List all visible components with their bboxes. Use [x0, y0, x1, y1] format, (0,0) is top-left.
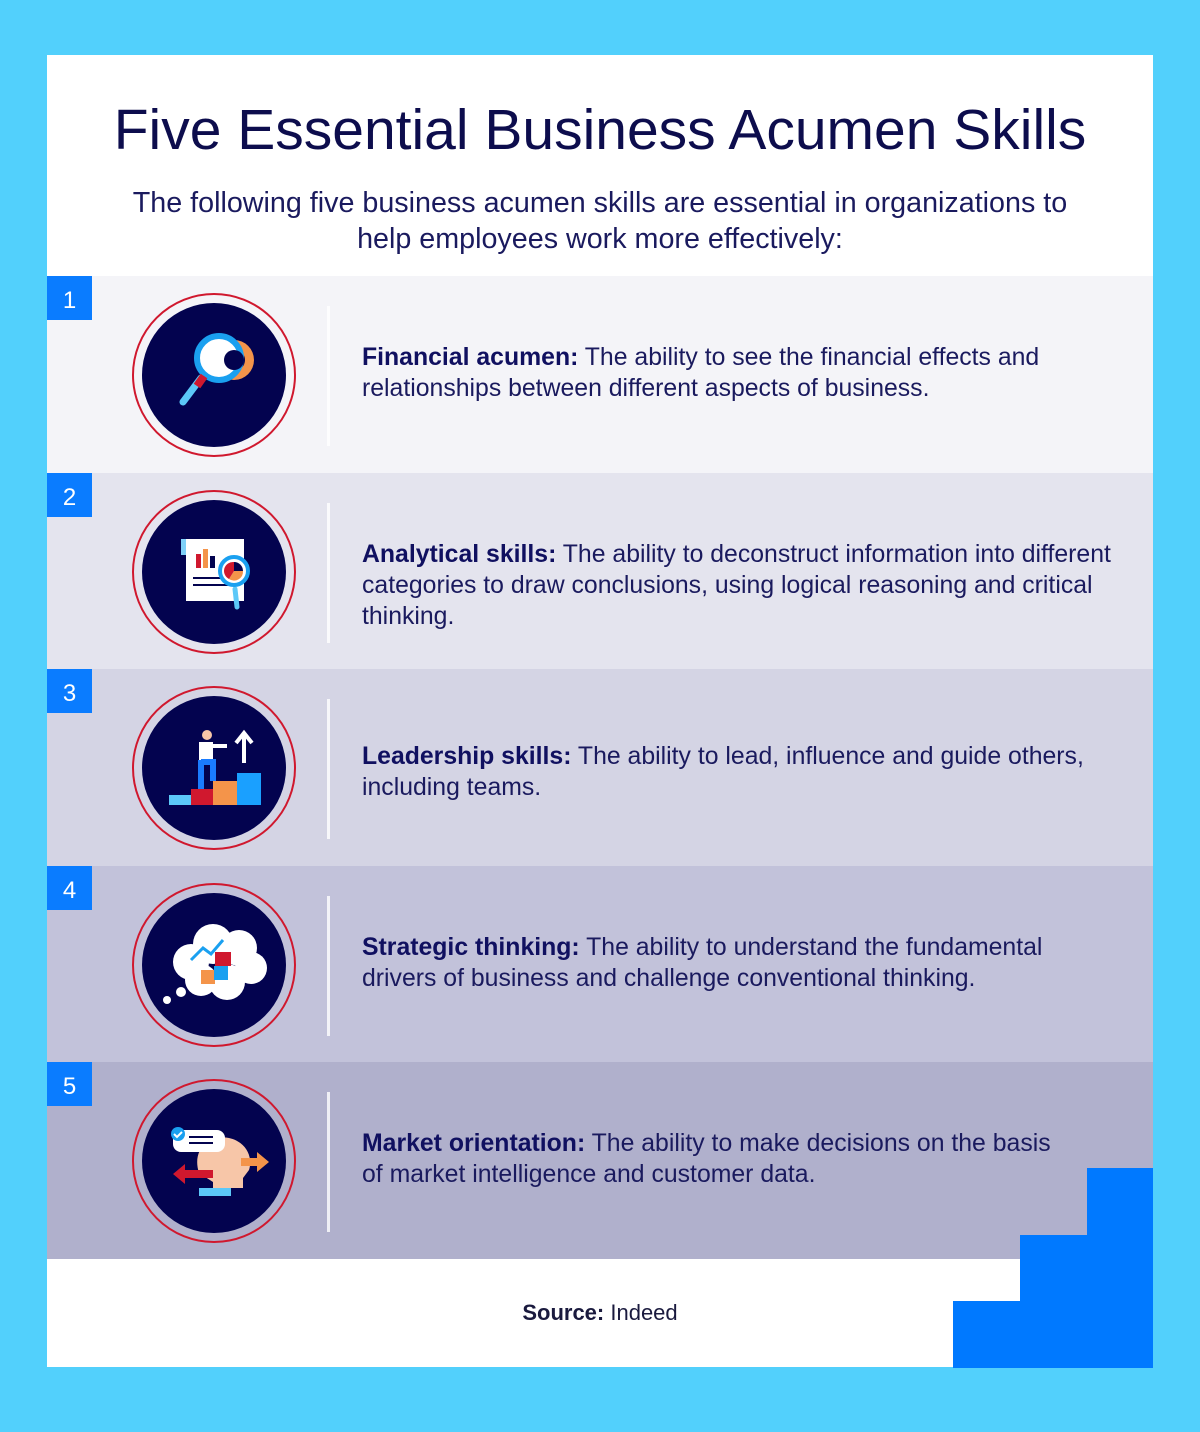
- text: Strategic thinking: The ability to understand the fundamental: [362, 934, 1042, 961]
- text: Analytical skills: The ability to deconstruct information into different: [362, 541, 1111, 568]
- row 5: 5: [63, 1073, 76, 1100]
- icon: head arrows: [132, 1079, 296, 1243]
- text: Market orientation: The ability to make decisions on the basis: [362, 1130, 1051, 1157]
- row 1: 1: [63, 287, 76, 314]
- row 2: 2: [63, 484, 76, 511]
- subtitle: [133, 187, 1067, 255]
- icon: thought cloud puzzle: [132, 883, 296, 1047]
- row 3: 3: [63, 680, 76, 707]
- subtitle: help employees work more effectively:: [357, 223, 843, 255]
- text: [362, 344, 1039, 402]
- icon: magnifier gear: [132, 293, 296, 457]
- text: [362, 743, 1084, 801]
- row 5: [47, 1062, 1153, 1259]
- row 1: [47, 276, 1153, 473]
- text: [362, 541, 1111, 630]
- text: including teams.: [362, 774, 541, 801]
- text: [362, 1130, 1051, 1188]
- subtitle: The following five business acumen skills are essential in organizations to: [133, 187, 1067, 219]
- row 4: [47, 866, 1153, 1063]
- icon: leader stairs: [132, 686, 296, 850]
- row 3: [47, 669, 1153, 866]
- text: relationships between different aspects of business.: [362, 375, 929, 402]
- text: thinking.: [362, 603, 454, 630]
- title: Five Essential Business Acumen Skills: [114, 98, 1086, 162]
- text: Leadership skills: The ability to lead, influence and guide others,: [362, 743, 1084, 770]
- source: Source: Indeed: [522, 1300, 678, 1325]
- row 2: [47, 473, 1153, 670]
- text: Financial acumen: The ability to see the financial effects and: [362, 344, 1039, 371]
- icon: report: [132, 490, 296, 654]
- row 4: 4: [63, 877, 76, 904]
- decorative stairs: [953, 1168, 1153, 1368]
- text: of market intelligence and customer data.: [362, 1161, 815, 1188]
- text: drivers of business and challenge conventional thinking.: [362, 965, 975, 992]
- text: categories to draw conclusions, using logical reasoning and critical: [362, 572, 1093, 599]
- text: [362, 934, 1042, 992]
